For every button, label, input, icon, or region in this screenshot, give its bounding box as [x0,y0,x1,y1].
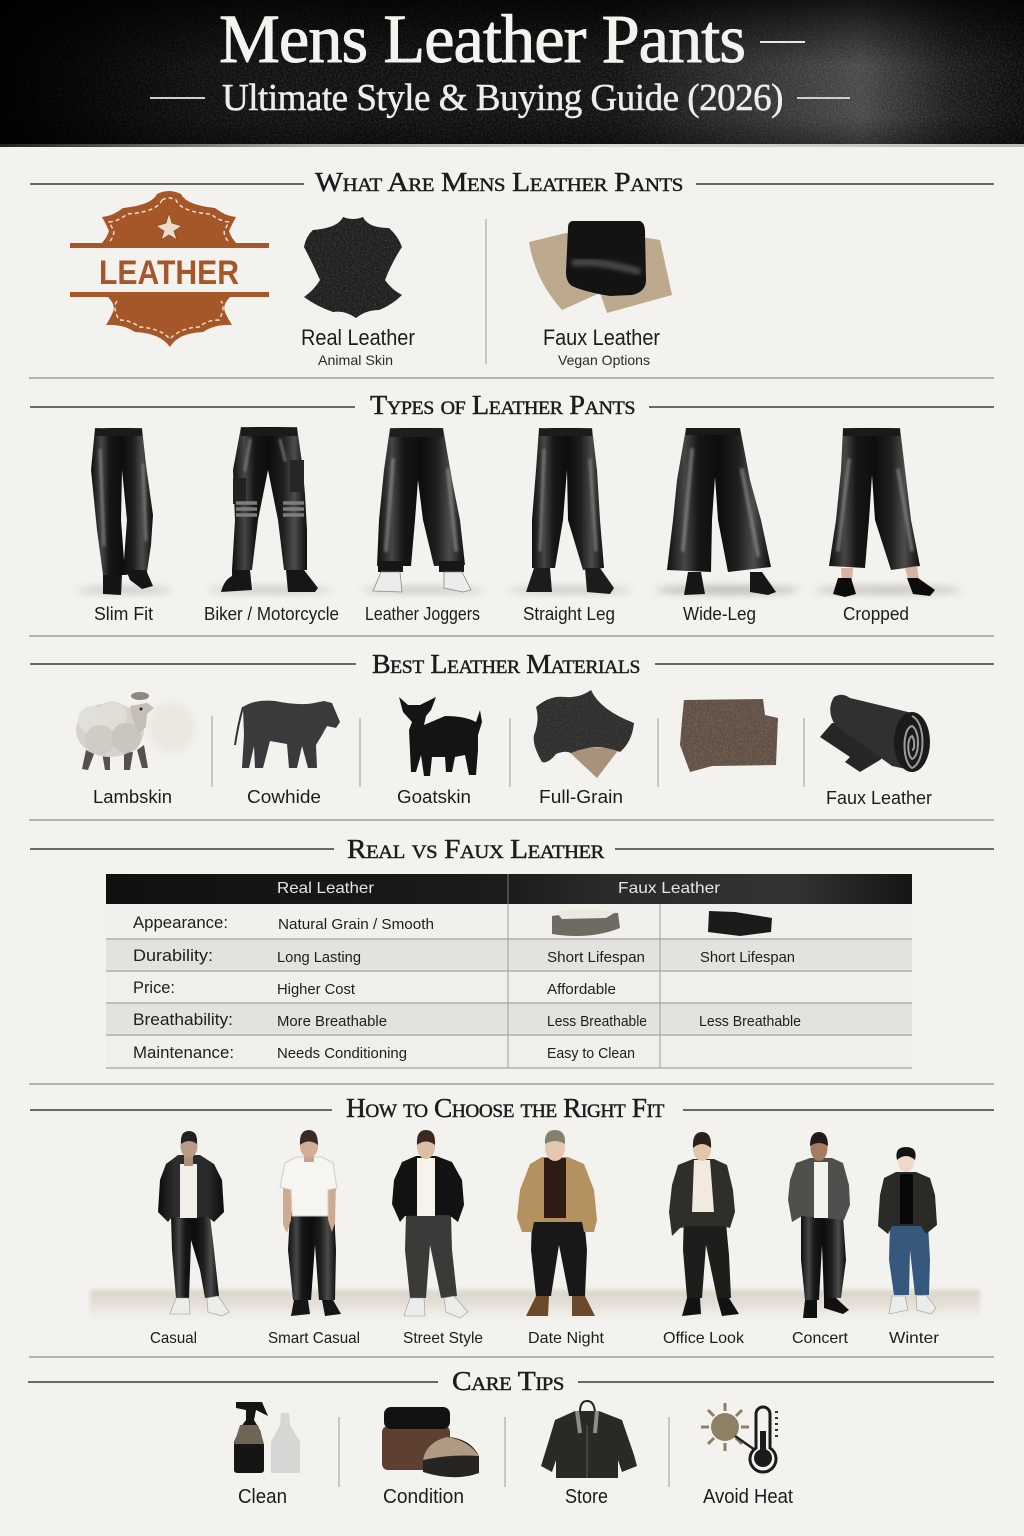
section: types of leather pants [30,390,994,624]
label: full-grain: Full-Grain [539,787,623,807]
label: real leather [301,325,415,368]
heading: how to choose the right fit: How to Choose the Right Fit [346,1093,665,1123]
label: lambskin: Lambskin [93,787,172,807]
row: maintenance: Needs Conditioning [277,1045,407,1062]
figure: concert [788,1132,850,1318]
icon: textured brown leather [680,699,778,772]
label: casual: Casual [150,1330,197,1347]
floor band [90,1290,980,1320]
row: appearance: Natural Grain / Smooth [278,916,434,933]
icon: leather badge: LEATHER [99,254,239,292]
pants: wide-leg [655,428,799,595]
pants: slim fit [77,428,173,595]
subtitle: Ultimate Style & Buying Guide (2026) [222,77,783,119]
section: real vs faux leather [30,834,994,1068]
icon: faux leather swatch [529,221,672,313]
row: breathability: Less Breathable [547,1013,647,1030]
label: biker motorcycle: Biker / Motorcycle [204,604,339,624]
row: durability [133,946,795,966]
pants: cropped [814,428,962,597]
icon: spray bottles [234,1402,300,1473]
icon: conditioner jar [382,1407,479,1477]
row: breathability: More Breathable [277,1013,387,1030]
pants: straight leg [508,428,632,594]
row: durability: Long Lasting [277,949,361,966]
label: real leather: Real Leather [301,325,415,350]
label: cropped: Cropped [843,604,909,624]
label: leather joggers: Leather Joggers [365,604,480,624]
figure: winter [878,1147,937,1314]
label: straight leg: Straight Leg [523,604,615,624]
section: what are mens leather pants [30,167,994,368]
label: street style: Street Style [403,1330,483,1347]
table header: Real Leather [277,880,375,897]
label: faux leather: Faux Leather [543,325,660,350]
heading: real vs faux leather: Real vs Faux Leather [347,834,605,864]
label: goatskin: Goatskin [397,787,471,807]
label: slim fit: Slim Fit [94,604,153,624]
figure: office look [669,1132,739,1316]
section: care tips [28,1366,994,1508]
heading: care tips: Care Tips [452,1366,564,1396]
row: maintenance: Maintenance: [133,1043,234,1062]
pants: leather joggers [361,428,485,593]
section: how to choose the right fit [30,1093,994,1347]
row: price [133,978,616,998]
label: faux leather material: Faux Leather [826,788,932,808]
label: concert: Concert [792,1330,849,1347]
label: wide-leg: Wide-Leg [683,604,756,624]
heading: best leather materials: Best Leather Materials [372,649,640,679]
figure: street style [392,1130,468,1318]
pants: biker [208,427,332,593]
icon: real swatch [552,909,620,936]
row: breathability [133,1010,801,1030]
label: faux leather [543,325,660,368]
figure: smart casual [280,1130,341,1316]
row: durability: Durability: [133,946,213,965]
icon: avoid heat sun and thermometer [701,1403,778,1472]
row: appearance [133,909,772,936]
row: durability: Short Lifespan [700,949,795,966]
icon: sheep [76,692,196,770]
icon: leather badge [70,191,269,347]
row: price: Higher Cost [277,981,356,998]
comparison table [106,874,912,1068]
row: price: Price: [133,978,175,997]
figure: date night [517,1130,597,1316]
label: store: Store [565,1486,608,1508]
label: real leather: Animal Skin [318,352,393,368]
header banner [0,0,1024,147]
label: condition: Condition [383,1486,464,1508]
row: price: Affordable [547,981,616,998]
row: breathability: Less Breathable [699,1013,801,1030]
icon: cow [235,701,340,768]
icon: goat [399,697,482,776]
row: durability: Short Lifespan [547,949,645,966]
label: avoid heat: Avoid Heat [703,1486,793,1508]
label: winter: Winter [889,1330,940,1347]
label: faux leather: Vegan Options [558,352,650,368]
label: office look: Office Look [663,1330,745,1347]
icon: faux leather roll [820,695,930,772]
label: smart casual: Smart Casual [268,1330,360,1347]
icon: faux swatch [708,911,772,936]
heading: types of leather pants: Types of Leather Pants [370,390,635,420]
table header [106,874,912,904]
section: best leather materials [30,649,994,808]
row: maintenance: Easy to Clean [547,1045,635,1062]
table header: Faux Leather [618,880,721,897]
label: clean: Clean [238,1486,287,1508]
icon: real leather hide [304,217,402,318]
heading: what are mens leather pants: What Are Mens Leather Pants [315,167,683,197]
icon: full-grain leather [534,690,634,778]
label: cowhide: Cowhide [247,787,321,807]
label: date night: Date Night [528,1330,605,1347]
figure: casual [158,1131,229,1316]
row: breathability: Breathability: [133,1010,233,1029]
icon: stored jacket on hanger [541,1401,637,1478]
row: maintenance [133,1043,635,1062]
row: appearance: Appearance: [133,913,228,932]
title: Mens Leather Pants [219,1,745,77]
